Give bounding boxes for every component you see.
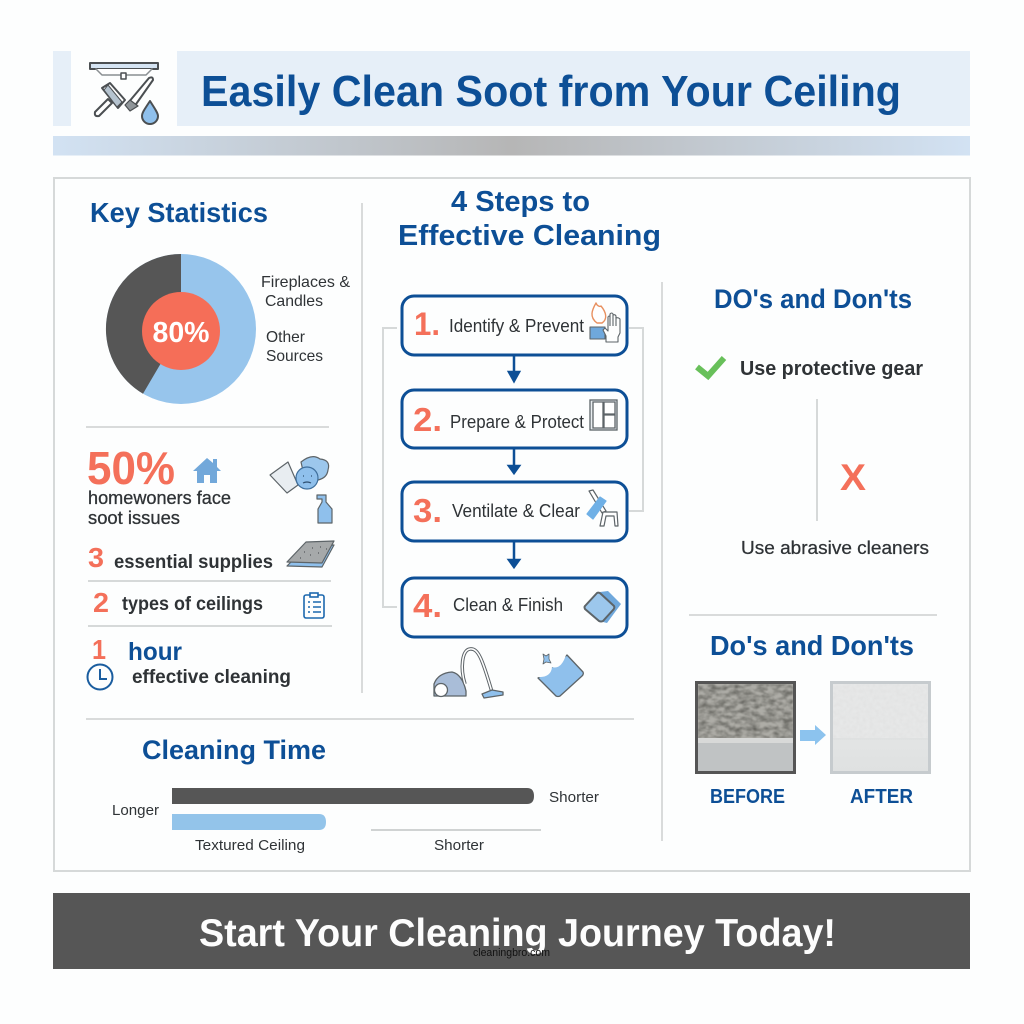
- after label: AFTER: [850, 786, 914, 808]
- bar chart: Longer: [112, 802, 159, 819]
- pie chart: 80%: [152, 317, 210, 349]
- icon: cleaning cloth with sparkle: [537, 654, 583, 696]
- before label: BEFORE: [710, 786, 785, 808]
- stat: 50 percent: [87, 442, 332, 528]
- step 3: Ventilate & Clear: [452, 501, 580, 521]
- heading: key statistics: Key Statistics: [90, 197, 268, 228]
- stat: 3 essential supplies: [88, 541, 334, 573]
- stat: 50 percent: 50%: [87, 442, 175, 494]
- panel: before and after: [695, 630, 931, 808]
- arrow: [800, 725, 826, 745]
- icon: sponge: [287, 541, 334, 567]
- stat: 2 types of ceilings: [93, 587, 324, 618]
- heading: before and after: Do's and Don'ts: [710, 630, 914, 661]
- gradient divider bar: [53, 136, 970, 156]
- step 3: 3.: [413, 492, 442, 529]
- bar chart: Shorter: [434, 837, 484, 854]
- pie legend: Candles: [265, 293, 323, 310]
- stat: 2 types of ceilings: types of ceilings: [122, 593, 263, 615]
- step 2: [402, 390, 627, 448]
- dont item: Use abrasive cleaners: [741, 538, 929, 558]
- step 1: 1.: [414, 306, 440, 342]
- step 1: [402, 296, 627, 355]
- heading: 4 steps: [398, 186, 661, 252]
- heading: 4 steps: 4 Steps to: [451, 186, 590, 218]
- before photo: [695, 681, 796, 774]
- step 2: Prepare & Protect: [450, 412, 584, 432]
- icon: clipboard: [304, 593, 324, 618]
- pie legend: Fireplaces &: [261, 274, 350, 291]
- step 4: [402, 578, 627, 637]
- step 3: [402, 482, 627, 541]
- bar chart: Shorter: [549, 789, 599, 806]
- step 1: Identify & Prevent: [449, 316, 584, 336]
- panel: dos and donts: [697, 284, 929, 558]
- pie chart: [106, 254, 256, 404]
- pie legend: Other: [266, 329, 306, 346]
- icon: ceiling light with brush and water drop: [90, 63, 158, 124]
- connector lines: [383, 328, 643, 607]
- arrow 1 to 2: [509, 355, 519, 381]
- arrow 2 to 3: [509, 449, 519, 473]
- flowchart: steps: [402, 296, 627, 637]
- after photo: [830, 681, 931, 774]
- footer banner: Start Your Cleaning Journey Today!: [199, 912, 836, 955]
- stat: 2 types of ceilings: 2: [93, 587, 109, 618]
- step 4: 4.: [413, 587, 442, 624]
- icon: house: [193, 458, 221, 483]
- heading: cleaning time: Cleaning Time: [142, 735, 326, 765]
- title: Easily Clean Soot from Your Ceiling: [201, 67, 901, 116]
- panel: cleaning time: [112, 735, 599, 854]
- stat: 50 percent: soot issues: [88, 508, 180, 528]
- pie legend: [261, 274, 350, 365]
- heading: dos and donts: DO's and Don'ts: [714, 284, 912, 314]
- icon: mask and spray bottle: [270, 457, 332, 523]
- icon: green check: [697, 358, 724, 376]
- stat: 1 hour effective cleaning: [88, 634, 291, 690]
- stat: 3 essential supplies: essential supplies: [114, 551, 273, 573]
- bar chart: [112, 788, 599, 854]
- icon: window: [590, 400, 617, 430]
- bar chart: Textured Ceiling: [195, 837, 305, 854]
- do item: Use protective gear: [740, 358, 923, 380]
- header banner: [53, 51, 970, 126]
- stat: 3 essential supplies: 3: [88, 542, 104, 573]
- stat: 1 hour effective cleaning: hour: [128, 638, 182, 666]
- icon: vacuum cleaner: [434, 649, 503, 698]
- heading: 4 steps: Effective Cleaning: [398, 220, 661, 252]
- pie legend: Sources: [266, 348, 323, 365]
- panel: key statistics: [87, 197, 350, 690]
- icon: chair and scraper: [587, 490, 618, 526]
- footer banner: [53, 893, 970, 969]
- icon: red x: X: [840, 457, 866, 498]
- icon: clock: [88, 664, 112, 690]
- stat: 1 hour effective cleaning: effective cleaning: [132, 666, 291, 688]
- footer banner: cleaningbro.com: [473, 947, 550, 959]
- main panel frame: [54, 178, 970, 871]
- stat: 1 hour effective cleaning: 1: [92, 634, 106, 665]
- icon: flame and glove: [590, 303, 620, 342]
- step 4: Clean & Finish: [453, 595, 563, 615]
- arrow 3 to 4: [509, 541, 519, 567]
- step 2: 2.: [413, 401, 442, 438]
- stat: 50 percent: homewoners face: [88, 488, 231, 508]
- icon: cloth: [584, 591, 621, 623]
